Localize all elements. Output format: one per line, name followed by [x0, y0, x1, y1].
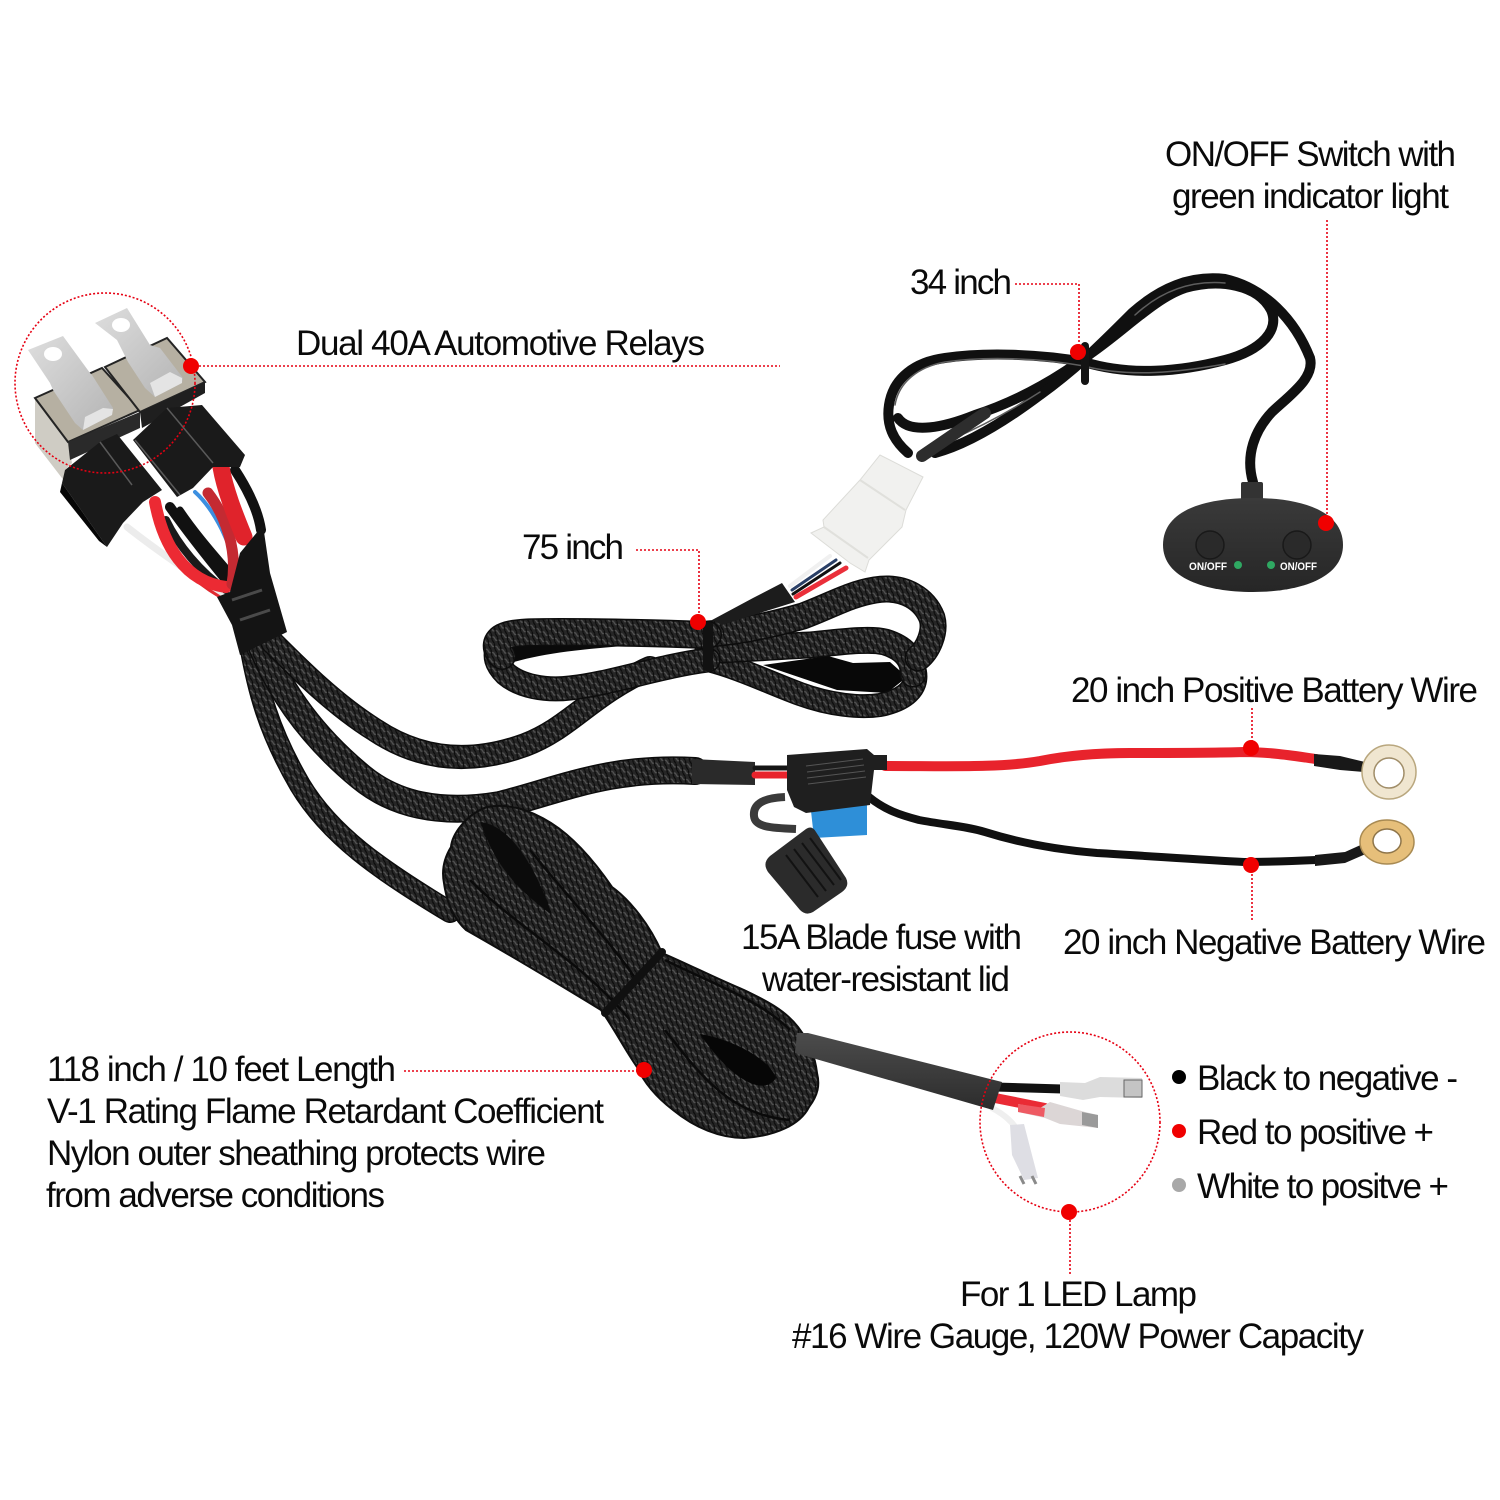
ring terminal negative — [1360, 820, 1414, 864]
legend: wire colours: Black to negative - — [1197, 1059, 1458, 1098]
label: harness length and sheathing: from adverse conditions — [46, 1176, 385, 1215]
relay module — [15, 293, 287, 655]
right relay body — [105, 338, 205, 412]
label: harness length and sheathing — [46, 1050, 604, 1215]
zip tie on coil — [605, 952, 662, 1013]
label: LED lamp capacity: #16 Wire Gauge, 120W Power Capacity — [792, 1317, 1364, 1356]
white plastic connector — [811, 455, 923, 572]
callout: switch pointer — [1318, 220, 1334, 531]
black negative battery wire — [869, 797, 1414, 866]
label: LED lamp capacity — [792, 1275, 1364, 1356]
callout: LED lamp ring pointer — [980, 1032, 1160, 1275]
white terminal — [1010, 1124, 1038, 1180]
relay pointer ring — [15, 293, 195, 473]
blue fuse — [811, 805, 867, 838]
left relay body — [35, 398, 72, 482]
switch button labels: ON/OFF — [1189, 561, 1227, 573]
34 inch switch cable — [888, 278, 1311, 482]
ON/OFF switch panel: ON/OFF — [1280, 561, 1317, 573]
75 inch braided coil — [496, 583, 933, 706]
label: blade fuse: 15A Blade fuse with — [741, 918, 1022, 957]
ring terminal positive — [1362, 745, 1416, 799]
callout: relay pointer — [183, 358, 780, 374]
callout: negative wire pointer — [1243, 857, 1259, 922]
big 118 inch braided coil — [443, 806, 818, 1138]
label: relays: Dual 40A Automotive Relays — [296, 324, 705, 363]
label: ON/OFF switch: green indicator light — [1172, 177, 1449, 216]
label: harness length and sheathing: V-1 Rating Flame Retardant Coefficient — [47, 1092, 604, 1131]
switch buttons — [1196, 531, 1224, 559]
LED lamp wire end — [795, 1033, 1142, 1184]
label: LED lamp capacity: For 1 LED Lamp — [960, 1275, 1197, 1314]
callout: 75 inch pointer — [636, 550, 706, 630]
callout: 34 inch pointer — [1015, 284, 1086, 360]
15A blade fuse holder — [754, 749, 887, 914]
label: harness length and sheathing: Nylon outer sheathing protects wire — [47, 1134, 546, 1173]
electrical tape — [217, 525, 287, 655]
callout: 118 inch pointer — [404, 1062, 652, 1078]
label: positive battery wire: 20 inch Positive Battery Wire — [1071, 671, 1478, 710]
fuse lid — [765, 828, 847, 914]
legend: wire colours — [1172, 1059, 1458, 1206]
cable shrink sleeve — [922, 413, 985, 456]
label: blade fuse — [741, 918, 1022, 999]
cable tie — [1081, 346, 1089, 381]
label: negative battery wire: 20 inch Negative Battery Wire — [1063, 923, 1486, 962]
relay wires — [127, 467, 261, 597]
connector wires — [790, 556, 846, 597]
label: 75 inch: 75 inch — [522, 528, 624, 567]
label: ON/OFF switch — [1165, 135, 1456, 216]
cap strap — [754, 797, 796, 829]
legend: wire colours: White to positve + — [1197, 1167, 1449, 1206]
red positive battery wire — [755, 745, 1416, 799]
ON/OFF switch panel — [1163, 482, 1343, 592]
red terminal — [1018, 1102, 1098, 1128]
label: blade fuse: water-resistant lid — [761, 960, 1010, 999]
callout: positive wire pointer — [1243, 708, 1259, 756]
indicator leds — [1234, 561, 1242, 569]
braid end tape — [712, 583, 795, 625]
fuse harness shrink tube — [692, 759, 755, 785]
label: harness length and sheathing: 118 inch / 10 feet Length — [47, 1050, 396, 1089]
black connectors — [62, 434, 162, 547]
metal tabs — [28, 336, 113, 430]
label: ON/OFF switch: ON/OFF Switch with — [1165, 135, 1456, 174]
label: 34 inch: 34 inch — [910, 263, 1012, 302]
coil cable tie — [703, 622, 713, 671]
black terminal — [1060, 1077, 1142, 1100]
fuse body — [787, 749, 887, 813]
relay braided branch cables — [250, 642, 695, 912]
legend: wire colours: Red to positive + — [1197, 1113, 1434, 1152]
